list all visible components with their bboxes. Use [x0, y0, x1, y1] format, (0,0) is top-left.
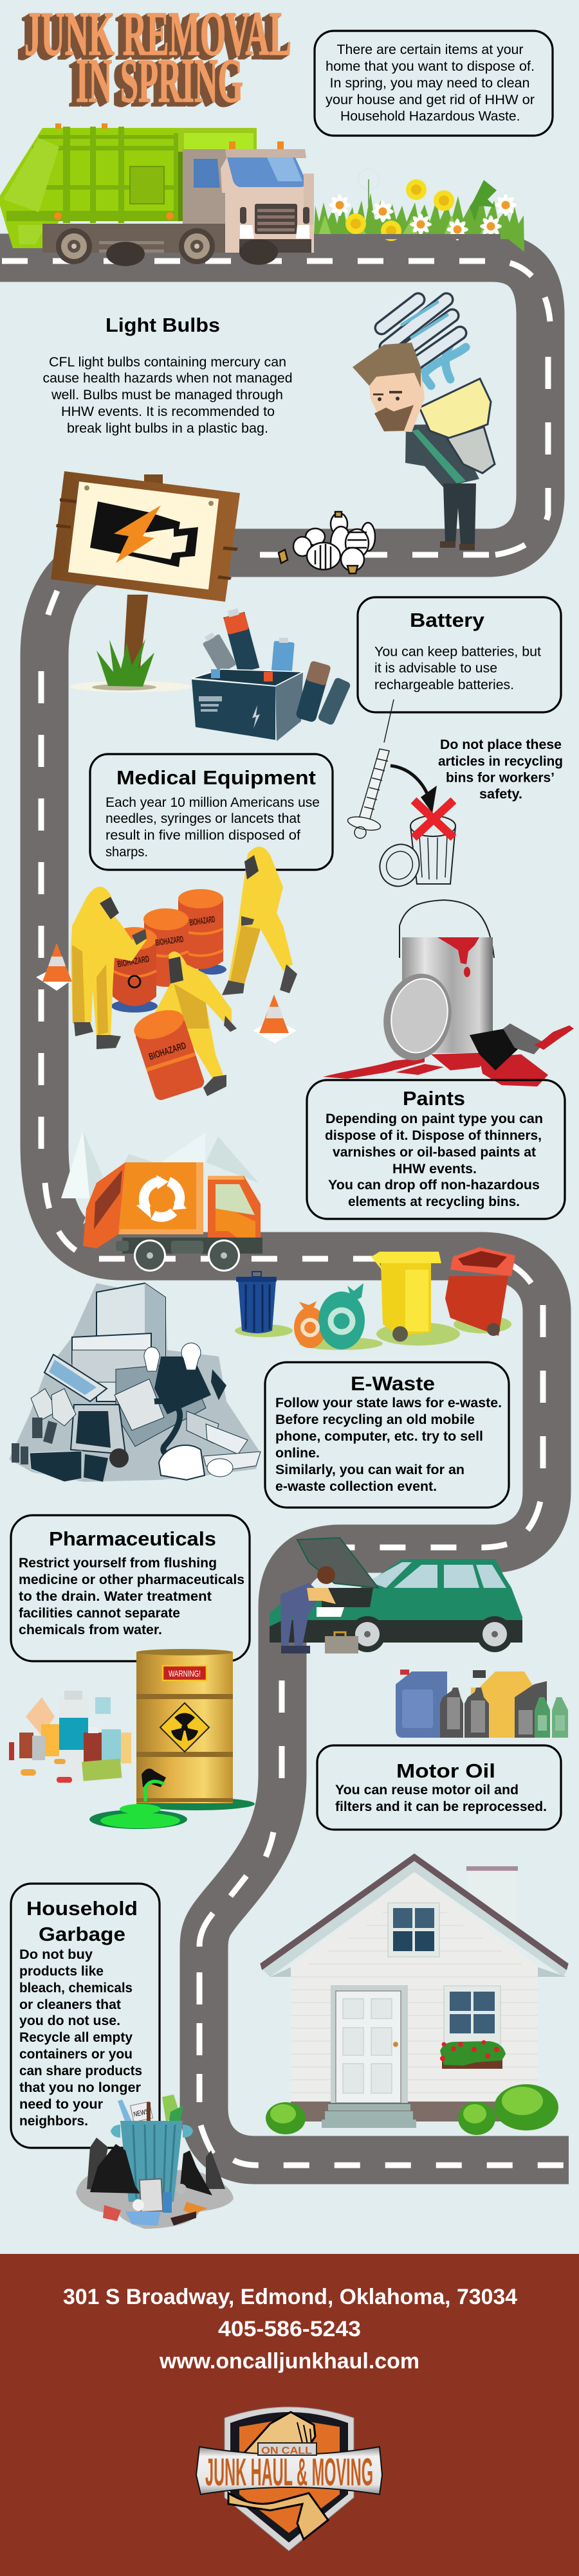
warning text: articles in recycling: [438, 753, 563, 769]
footer contact text: 301 S Broadway, Edmond, Oklahoma, 73034: [63, 2285, 517, 2309]
icon: biohazard barrels: BIOHAZARD: [116, 953, 150, 969]
panel: household garbage: that you no longer: [19, 2080, 142, 2095]
panel: e-waste: E-Waste: [351, 1372, 435, 1395]
panel: e-waste: e-waste collection event.: [275, 1479, 437, 1494]
panel: household garbage: need to your: [19, 2096, 104, 2112]
icon: medicine bottles: [9, 1691, 131, 1783]
footer contact text: www.oncalljunkhaul.com: [159, 2349, 419, 2373]
icon: orange recycling truck: [83, 1162, 262, 1272]
panel: medical equipment: result in five million disposed of: [106, 827, 300, 843]
panel: e-waste: online.: [275, 1445, 320, 1461]
panel: pharmaceuticals: [11, 1515, 250, 1661]
intro callout: There are certain items at your: [337, 42, 524, 57]
icon: traffic cone right: [253, 995, 297, 1043]
panel: battery: Battery: [410, 609, 485, 631]
panel: e-waste: Before recycling an old mobile: [275, 1412, 475, 1427]
panel: household garbage: Recycle all empty: [19, 2030, 133, 2045]
panel: household garbage: Do not buy: [19, 1947, 93, 1962]
panel: battery: it is advisable to use: [374, 660, 497, 676]
title: [24, 0, 291, 116]
panel: household garbage: bleach, chemicals: [19, 1980, 133, 1995]
icon: hazmat worker 3: [222, 847, 297, 995]
panel: paints: Depending on paint type you can: [326, 1111, 543, 1126]
panel: household garbage: or cleaners that: [19, 1997, 121, 2012]
icon: biohazard barrels: BIOHAZARD: [154, 933, 184, 948]
winding road: [0, 258, 569, 2165]
panel: e-waste: Follow your state laws for e-waste.: [275, 1395, 502, 1410]
warning text: bins for workers’: [446, 770, 555, 786]
panel: motor oil: You can reuse motor oil and: [335, 1782, 519, 1797]
panel: household garbage: Garbage: [39, 1923, 125, 1945]
panel: light bulbs text: [42, 314, 292, 436]
icon: bins and bags: [235, 1247, 515, 1350]
panel: light bulbs text: HHW events. It is recommended to: [61, 404, 275, 419]
panel: household garbage: you do not use.: [19, 2013, 120, 2028]
icon: overflowing trash can: NEWS: [133, 2108, 149, 2119]
title: IN SPRING: [76, 46, 243, 116]
panel: paints: HHW events.: [392, 1161, 477, 1176]
warning text: [438, 737, 563, 802]
intro callout: In spring, you may need to clean: [329, 75, 530, 91]
icon: biohazard barrels: BIOHAZARD: [188, 914, 216, 928]
panel: motor oil: [317, 1745, 561, 1830]
panel: medical equipment: needles, syringes or lancets that: [106, 811, 300, 826]
icon: hazmat worker 1: [71, 887, 147, 1049]
panel: light bulbs text: cause health hazards when not managed: [42, 370, 292, 386]
panel: household garbage: containers or you: [19, 2046, 133, 2062]
panel: light bulbs text: Light Bulbs: [106, 314, 220, 336]
intro callout: home that you want to dispose of.: [326, 59, 535, 74]
icon: overflowing trash can: [76, 2094, 234, 2229]
panel: medical equipment: [90, 754, 333, 870]
panel: household garbage: Household: [26, 1897, 138, 1920]
icon: white house: [261, 1855, 567, 2135]
icon: e-waste pile: [9, 1283, 261, 1482]
panel: battery: You can keep batteries, but: [374, 644, 541, 660]
panel: motor oil: Motor Oil: [396, 1760, 495, 1782]
icon: oil bottles: [396, 1670, 568, 1738]
icon: green garbage truck: [0, 123, 314, 266]
panel: medical equipment: Each year 10 million Americans use: [106, 795, 320, 810]
panel: pharmaceuticals: Pharmaceuticals: [49, 1527, 216, 1550]
panel: household garbage: [11, 1884, 160, 2148]
icon: mountains: [61, 1131, 259, 1225]
icon: flowers and grass: [314, 169, 524, 252]
icon: hazmat worker 2 with barrel: [131, 951, 237, 1102]
warning text: Do not place these: [440, 737, 562, 752]
panel: paints: You can drop off non-hazardous: [328, 1177, 540, 1193]
icon: man carrying giant bulb: [353, 300, 495, 550]
panel: medical equipment: sharps.: [106, 844, 148, 860]
panel: paints: dispose of it. Dispose of thinners,: [325, 1128, 542, 1143]
logo: on call junk haul and moving: ON CALL: [261, 2445, 312, 2456]
icon: biohazard barrels: [111, 889, 226, 1013]
icon: radioactive barrel with spill: [89, 1649, 255, 1829]
footer band: [0, 2254, 579, 2576]
panel: pharmaceuticals: chemicals from water.: [19, 1622, 162, 1637]
panel: pharmaceuticals: to the drain. Water treatment: [19, 1589, 212, 1604]
panel: motor oil: filters and it can be reprocessed.: [335, 1799, 547, 1814]
icon: car with mechanic: [270, 1538, 522, 1653]
panel: light bulbs text: well. Bulbs must be managed through: [51, 387, 283, 402]
panel: household garbage: neighbors.: [19, 2113, 88, 2129]
icon: batteries: [192, 607, 351, 741]
panel: light bulbs text: CFL light bulbs containing mercury can: [49, 354, 286, 370]
panel: household garbage: products like: [19, 1963, 104, 1979]
warning text: safety.: [479, 786, 522, 802]
panel: paints: elements at recycling bins.: [348, 1194, 520, 1209]
intro callout: your house and get rid of HHW or: [326, 92, 535, 107]
panel: paints: Paints: [403, 1087, 465, 1110]
panel: household garbage: can share products: [19, 2063, 142, 2078]
panel: battery: rechargeable batteries.: [374, 677, 514, 692]
panel: pharmaceuticals: Restrict yourself from flushing: [19, 1555, 217, 1571]
footer contact text: 405-586-5243: [218, 2317, 361, 2341]
icon: grass tuft: [96, 639, 154, 687]
panel: e-waste: phone, computer, etc. try to sell: [275, 1428, 483, 1444]
icon: paint can: [323, 900, 574, 1086]
icon: radioactive barrel with spill: WARNING!: [169, 1668, 201, 1679]
panel: paints: varnishes or oil-based paints at: [333, 1144, 536, 1160]
icon: pile of broken bulbs: [279, 512, 375, 573]
logo: on call junk haul and moving: [196, 2407, 382, 2551]
icon: traffic cone left: [36, 943, 74, 991]
footer contact text: [63, 2285, 517, 2373]
panel: e-waste: Similarly, you can wait for an: [275, 1462, 464, 1477]
intro callout: [315, 31, 553, 136]
panel: medical equipment: Medical Equipment: [116, 766, 316, 789]
panel: pharmaceuticals: facilities cannot separate: [19, 1605, 180, 1621]
panel: paints: [307, 1080, 565, 1219]
icon: battery sign post: [51, 471, 240, 692]
panel: light bulbs text: break light bulbs in a plastic bag.: [67, 420, 268, 436]
panel: e-waste: [265, 1362, 509, 1508]
title: JUNK REMOVAL: [24, 0, 291, 69]
panel: battery: [358, 597, 561, 712]
intro callout: Household Hazardous Waste.: [340, 108, 520, 123]
panel: pharmaceuticals: medicine or other pharmaceuticals: [19, 1572, 244, 1587]
icon: syringe and crossed bin: [347, 699, 455, 893]
icon: hazmat worker 2 with barrel: BIOHAZARD: [147, 1040, 188, 1063]
